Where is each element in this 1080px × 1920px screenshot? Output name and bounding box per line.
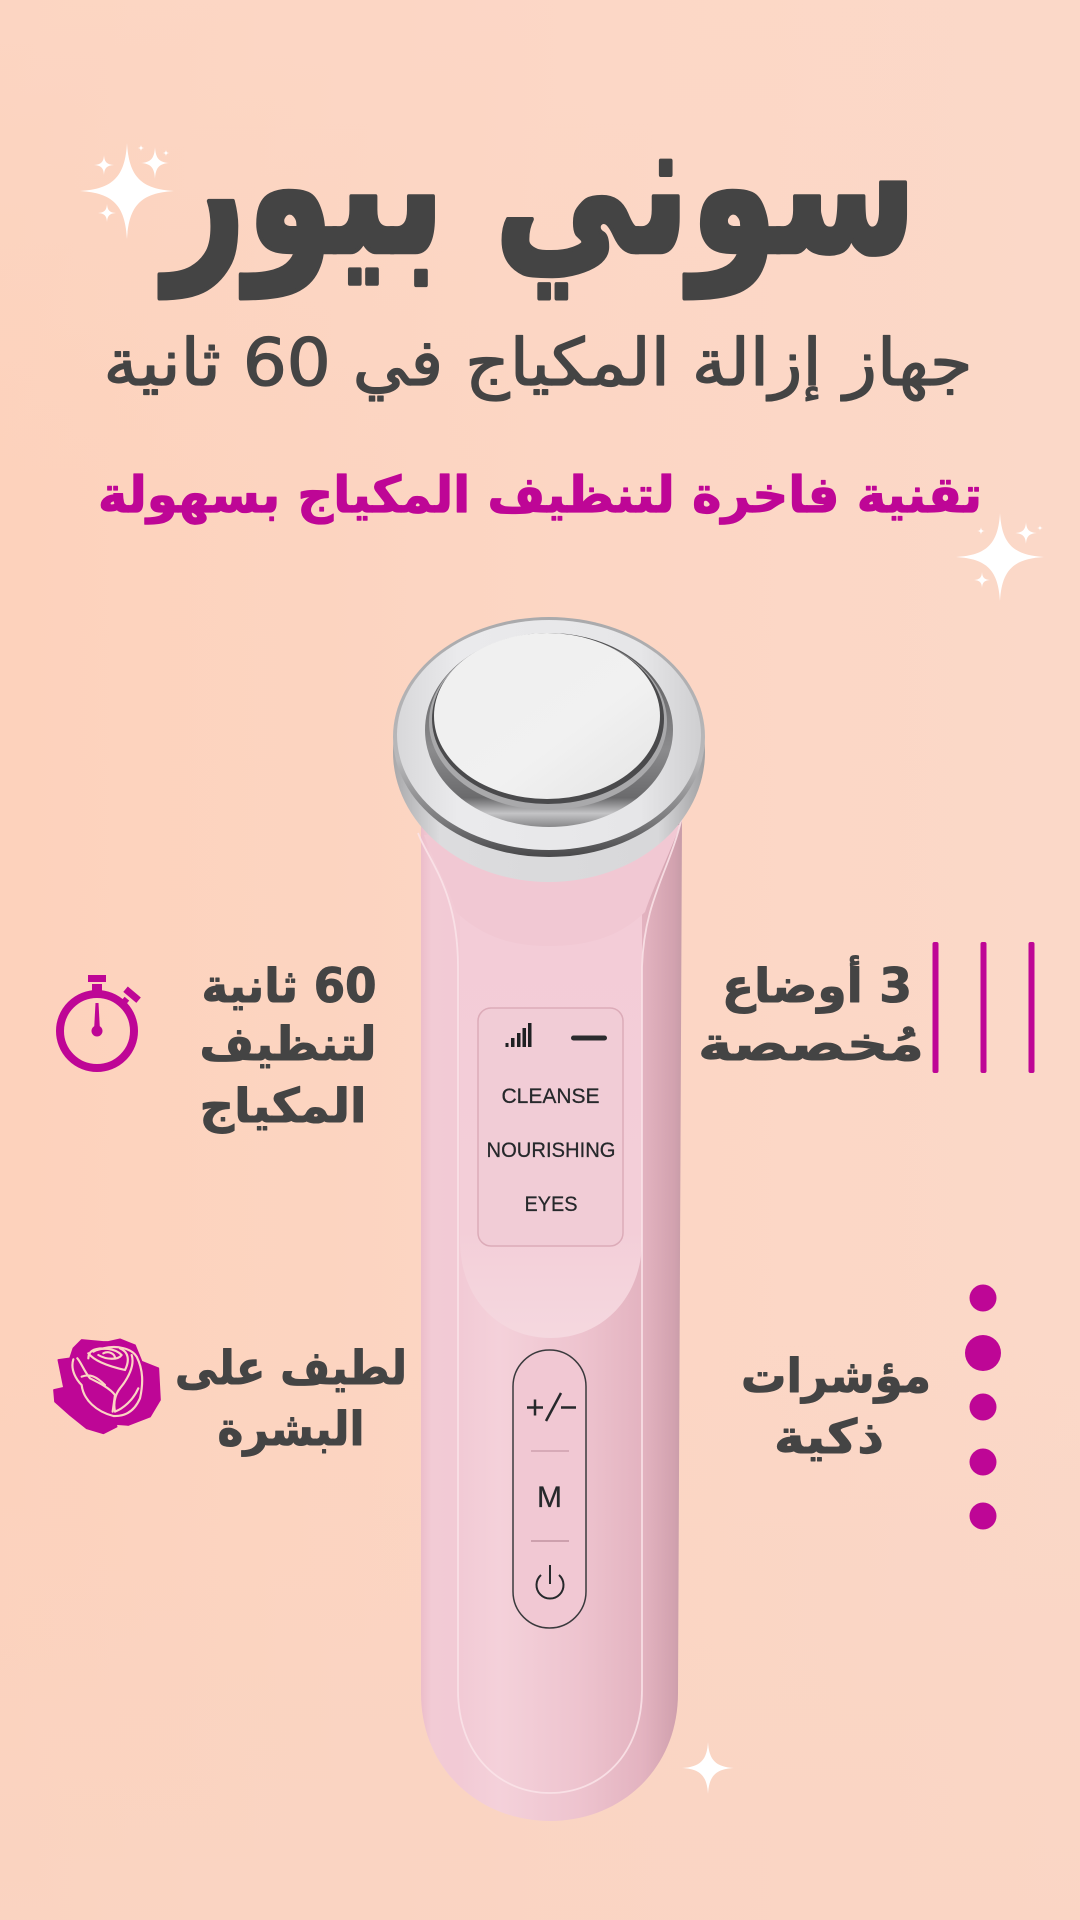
feature text: 60 seconds [200, 959, 376, 1134]
upper display panel [460, 900, 642, 1338]
sparkle: bottom [682, 1742, 734, 1794]
mode labels: CLEANSE [502, 1085, 600, 1108]
feature text: 60 seconds: المكياج [200, 1079, 366, 1134]
feature text: three modes [698, 956, 924, 1072]
feature text: smart indicators [741, 1349, 931, 1465]
product: facial device [393, 617, 705, 1821]
feature text: 60 seconds: 60 ثانية [202, 959, 376, 1014]
side grooves [418, 817, 682, 1793]
icon: rose [54, 1339, 160, 1433]
display screen: NOURISHING [486, 1139, 616, 1162]
battery dash [571, 1036, 607, 1040]
signal icon [506, 1023, 532, 1047]
feature text: gentle on skin [175, 1341, 407, 1457]
power icon [536, 1565, 563, 1599]
feature text: smart indicators: مؤشرات [741, 1349, 931, 1404]
sparkle cluster: top left [80, 143, 174, 239]
sparkle cluster: right of tagline [956, 513, 1044, 601]
arch under head [424, 825, 680, 946]
feature text: three modes: 3 أوضاع [722, 956, 912, 1014]
icon: stopwatch [60, 975, 141, 1068]
feature: three modes icon bars [932, 942, 1034, 1073]
feature text: gentle on skin: البشرة [218, 1402, 364, 1457]
title: سوني بيور [158, 77, 917, 299]
metal head [393, 617, 705, 882]
feature text: gentle on skin: لطيف على [175, 1341, 407, 1396]
feature text: smart indicators: ذكية [774, 1410, 884, 1465]
display screen: EYES [524, 1193, 578, 1216]
subtitle: جهاز إزالة المكياج في 60 ثانية [104, 325, 972, 401]
feature text: 60 seconds: لتنظيف [200, 1017, 376, 1072]
tagline: تقنية فاخرة لتنظيف المكياج بسهولة [98, 466, 982, 525]
device body [421, 820, 682, 1821]
display screen [478, 1008, 623, 1246]
plus minus [527, 1393, 576, 1421]
icon: indicator dots [965, 1284, 1001, 1530]
mode M: M [537, 1481, 562, 1514]
feature text: three modes: مُخصصة [698, 1017, 924, 1072]
control buttons [513, 1350, 586, 1628]
